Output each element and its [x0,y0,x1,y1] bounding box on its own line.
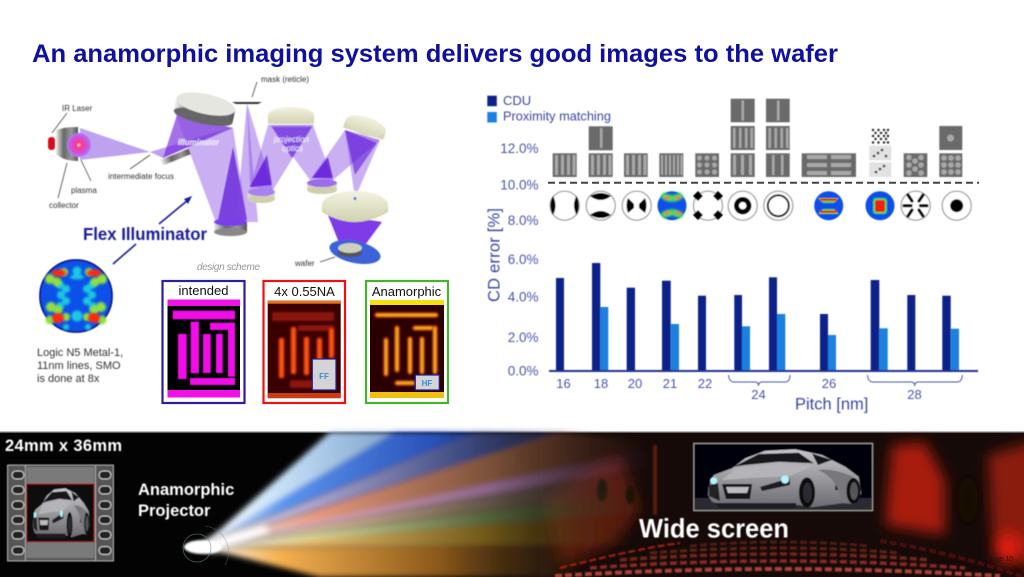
heading: design scheme: design scheme [197,262,260,273]
panel: Anamorphic [366,281,448,403]
pitch labels: 26 [822,376,836,391]
optics labels: collector [49,201,79,210]
text: logic note: 11nm lines, SMO [37,360,121,372]
y axis labels: 8.0% [508,213,538,228]
y axis labels: 0.0% [508,364,538,378]
y axis labels: 2.0% [508,330,538,345]
pitch labels: 24 [751,387,766,402]
pitch labels: 16 [556,376,571,391]
proximity matching bars [600,307,959,371]
mask pattern thumbnails [553,99,962,177]
pitch labels: 20 [628,376,642,391]
theatre seats [555,541,1024,577]
text: logic note: is done at 8x [37,373,100,385]
y axis labels: 10.0% [500,178,538,192]
banner: anamorphic projector and wide screen [0,431,1024,577]
optics labels: mask (reticle) [261,75,309,84]
banner labels [5,437,789,544]
purple light beams [80,103,382,245]
y axis labels: 6.0% [508,252,538,267]
callout: Flex Illuminator: Flex Illuminator [83,224,207,244]
theatre background [512,433,1024,577]
projection optics mirrors [248,107,388,222]
CDU bars [556,263,951,371]
text: logic note: Logic N5 Metal-1, [37,347,123,359]
pitch labels: 18 [594,376,608,391]
optics inner labels [178,135,310,153]
optics labels: intermediate focus [108,172,174,181]
title: An anamorphic imaging system delivers good images to the wafer [32,40,838,68]
banner labels: 24mm x 36mm [5,437,122,455]
panel: intended [162,281,244,403]
legend: CDU [503,93,531,108]
icon: illuminator pupil [40,260,112,332]
panel: 4x 0.55NA [264,281,345,403]
icon: film strip with car [8,465,114,561]
banner labels: Wide screen [639,514,789,544]
illuminator mirrors [161,88,247,236]
pitch group braces [728,375,962,386]
y axis labels: 4.0% [508,290,538,304]
panel: Anamorphic: HF [422,379,432,388]
threshold dashed line [548,182,979,184]
banner labels: Anamorphic [138,481,234,499]
y axis title: CD error [%] [486,208,504,302]
laser and collector [48,127,91,161]
pitch labels: 28 [907,387,922,402]
x axis title: Pitch [nm] [795,396,868,414]
panel: intended: intended [179,283,228,298]
optics inner labels: optics [282,144,303,153]
pitch labels: 21 [663,376,677,391]
legend [487,93,611,124]
y axis labels: 12.0% [500,141,538,156]
optics inner labels: projection [273,135,310,144]
colored freeform pupil icons [658,191,894,220]
bar chart: CD error by pitch [486,141,978,414]
text: logic note [37,347,123,385]
projector light beam [205,432,650,577]
wafer [327,236,383,268]
panel: EUV optical system diagram [48,75,388,268]
illumination pupil icons [550,191,971,220]
optics labels: wafer [294,259,315,268]
y axis labels [500,141,538,378]
optics inner labels: illuminator [178,138,220,147]
page number: Page 10 [987,556,1013,563]
pitch labels [556,376,922,402]
panel: Anamorphic: Anamorphic [372,284,442,299]
screen image: wide car [694,443,873,511]
optics labels: IR Laser [62,104,93,113]
panel: 4x 0.55NA: 4x 0.55NA [274,284,335,299]
banner labels: Projector [138,502,211,520]
callout: Flex Illuminator [83,196,207,264]
optics labels [49,75,315,268]
legend: Proximity matching [503,108,611,124]
leader lines [52,82,335,262]
pitch labels: 22 [698,376,712,391]
mask [232,102,262,104]
panel: 4x 0.55NA: FF [319,372,329,381]
optics labels: plasma [71,186,97,195]
